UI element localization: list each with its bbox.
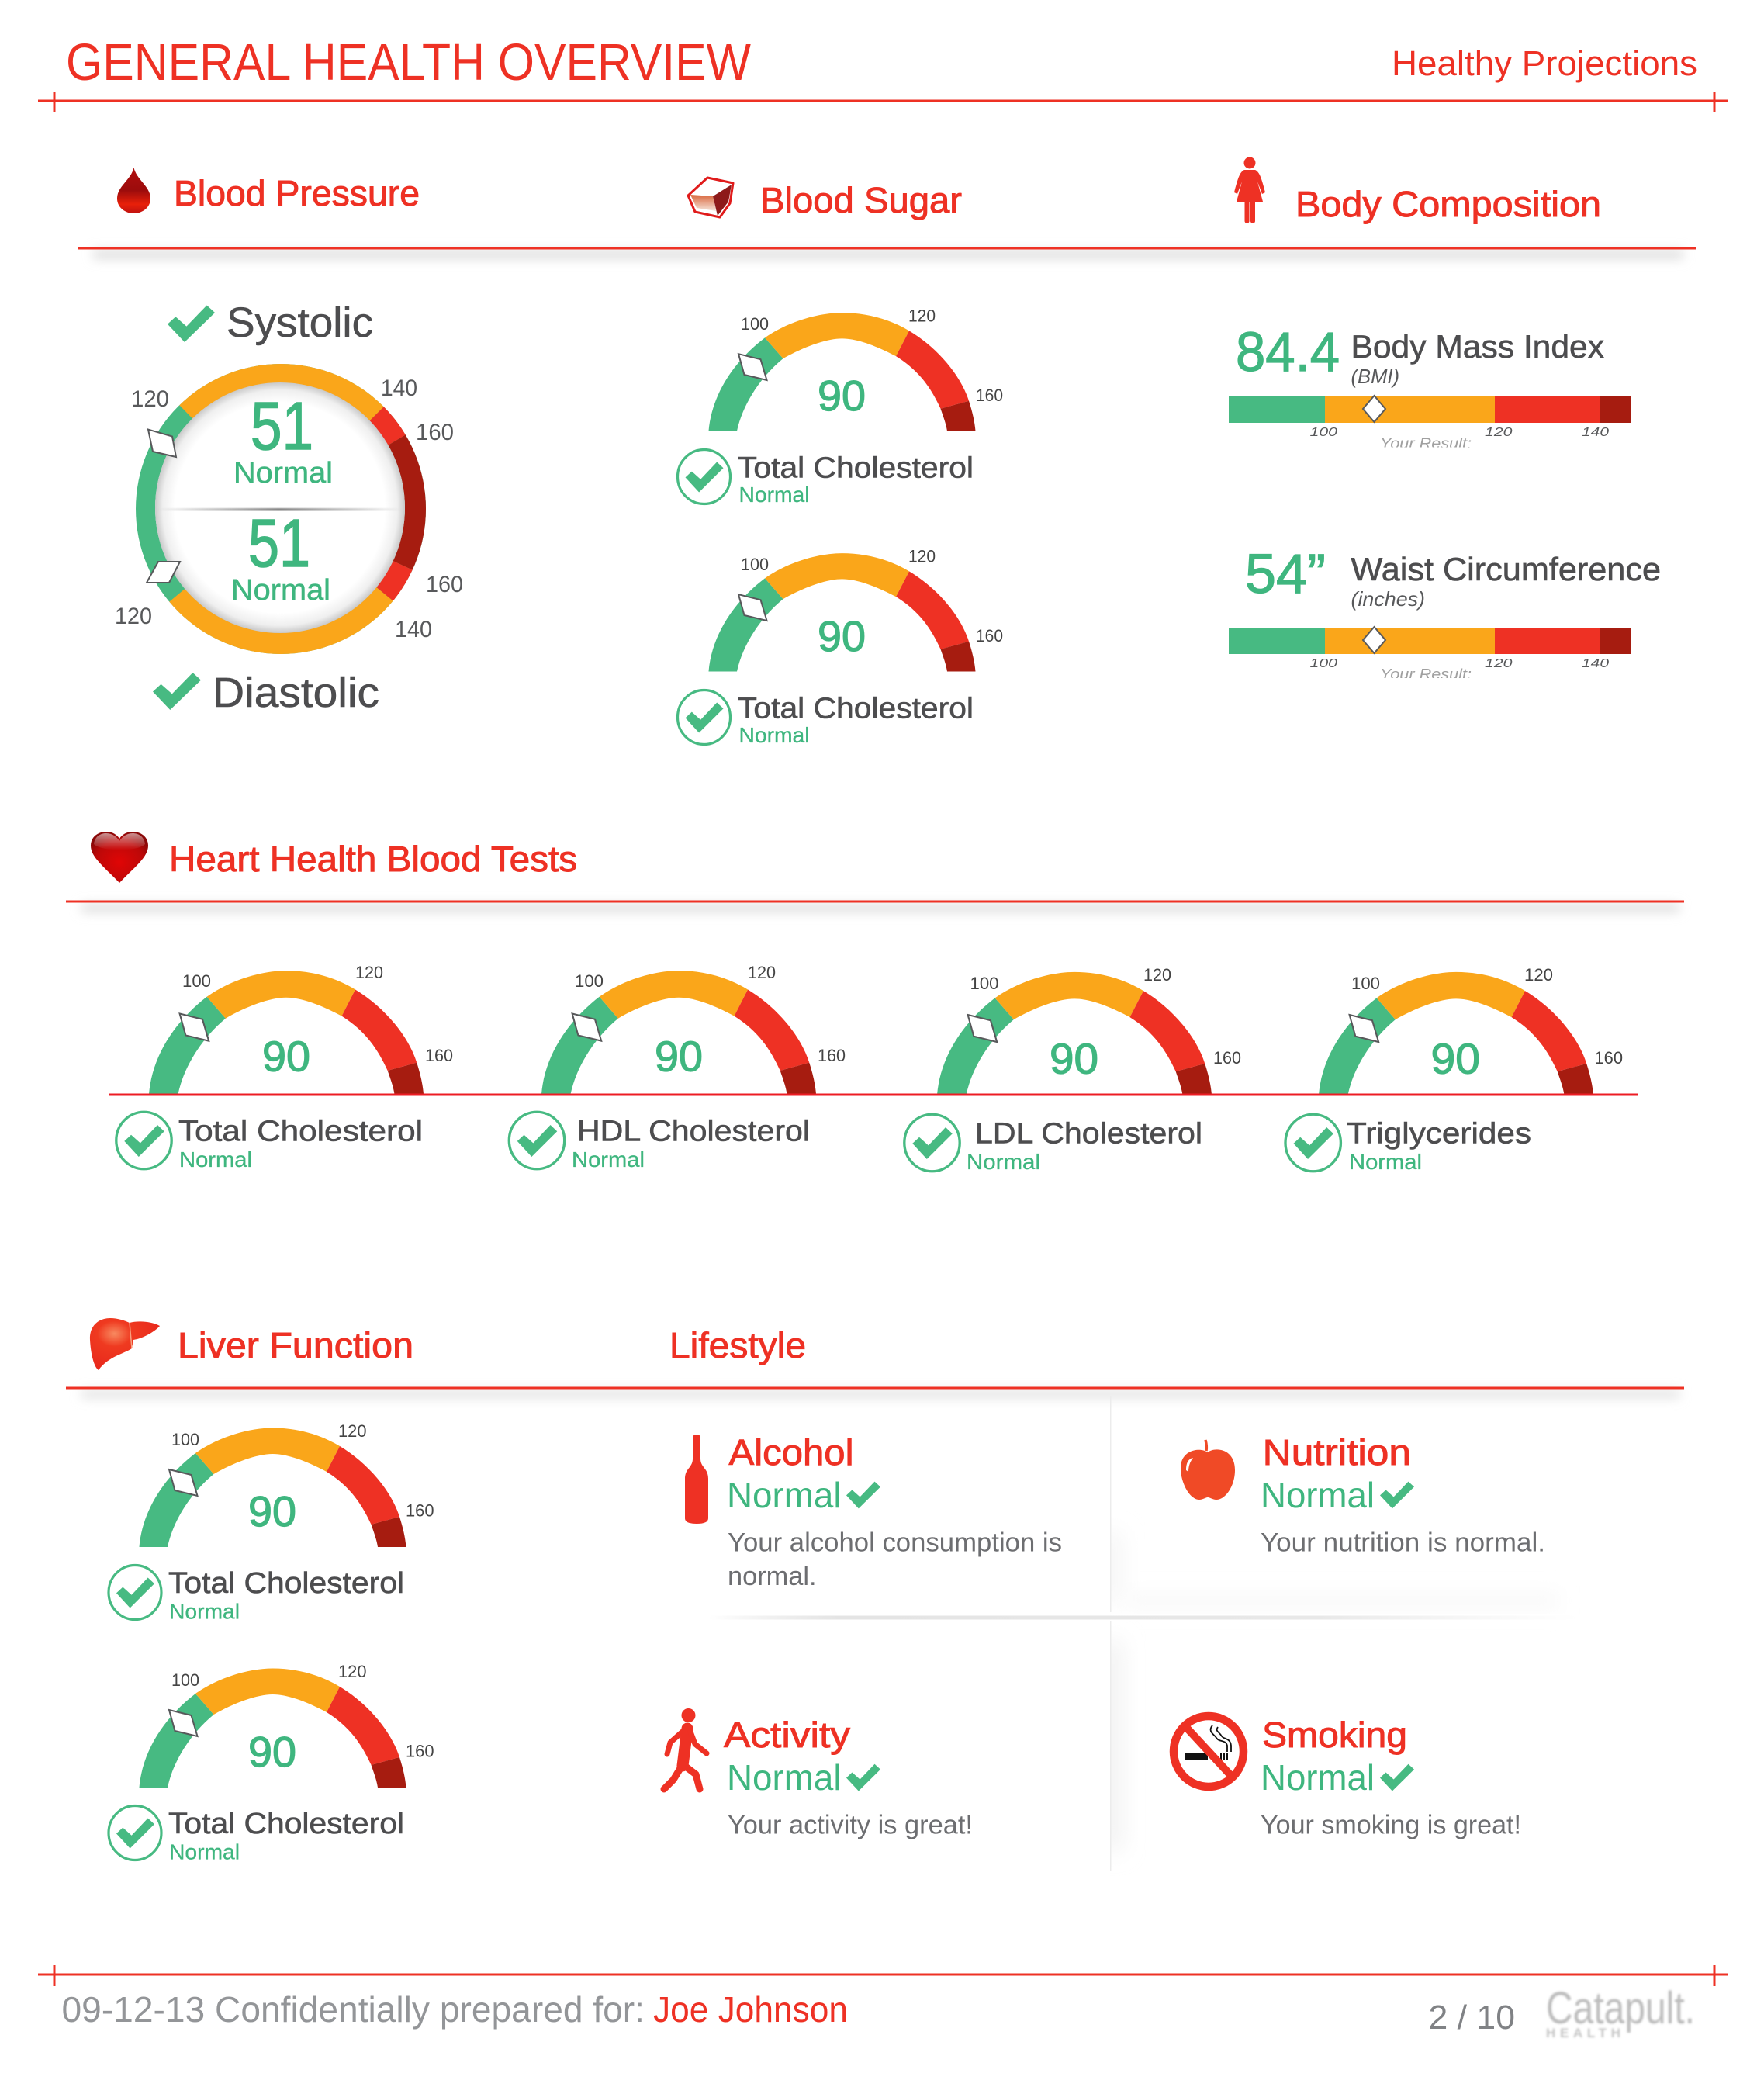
gauge: ldl cholesterol — [904, 965, 1241, 1174]
gauge: triglycerides — [1285, 965, 1623, 1174]
panel: activity: Your activity is great! — [728, 1811, 973, 1840]
blood sugar gauge 1: Normal — [738, 483, 810, 507]
panel: alcohol: Alcohol — [729, 1432, 853, 1473]
gauge: ldl cholesterol: LDL Cholesterol — [975, 1117, 1202, 1150]
section rule shadow liver — [81, 1390, 1679, 1398]
panel: activity: Normal — [727, 1757, 841, 1798]
heading: lifestyle: Lifestyle — [669, 1325, 806, 1365]
liver gauge 1: Normal — [169, 1600, 240, 1623]
gauge: hdl cholesterol: 100 — [575, 971, 604, 991]
blood sugar gauge 2: 100 — [741, 555, 769, 574]
icon: no smoking — [1174, 1716, 1243, 1787]
blood sugar gauge 2: Total Cholesterol — [738, 692, 974, 725]
gauge: hdl cholesterol: Normal — [572, 1147, 645, 1172]
heading: heart health blood tests: Heart Health Blood Tests — [169, 839, 577, 879]
section rule shadow top — [93, 250, 1683, 259]
gauge: triglycerides: Normal — [1349, 1150, 1422, 1174]
gauge: total cholesterol: Normal — [179, 1147, 252, 1172]
chart: blood pressure circular gauge — [116, 364, 462, 654]
subtitle: healthy projections: Healthy Projections — [1392, 43, 1697, 83]
gauge: total cholesterol: 90 — [262, 1032, 310, 1080]
icon: bottle — [685, 1435, 708, 1524]
liver gauge 2: 160 — [406, 1741, 434, 1761]
gauge tick labels: 160 — [426, 572, 463, 597]
gauge: total cholesterol: Total Cholesterol — [178, 1116, 423, 1148]
panel: body mass index: 100 — [1309, 426, 1337, 439]
panel: smoking: Normal — [1261, 1757, 1375, 1798]
section rule top — [78, 247, 1696, 250]
panel: alcohol: Normal — [727, 1475, 841, 1515]
blood sugar gauge 2: 120 — [908, 546, 936, 566]
panel: activity — [664, 1708, 973, 1840]
gauge: triglycerides: 100 — [1351, 974, 1380, 993]
label: diastolic: Diastolic — [213, 670, 379, 716]
panel: nutrition: Nutrition — [1263, 1432, 1411, 1473]
gauge inner disc — [155, 382, 405, 633]
lifestyle dividers — [709, 1396, 1669, 1885]
blood sugar gauge 1: 160 — [976, 386, 1003, 405]
panel: body mass index: 140 — [1582, 426, 1609, 439]
gauge: ldl cholesterol: 100 — [970, 974, 999, 993]
panel: waist circumference: Waist Circumference — [1351, 551, 1661, 587]
blood sugar gauge 1: 100 — [741, 314, 769, 334]
liver gauge 2: Total Cholesterol — [168, 1808, 404, 1840]
gauge tick labels: 120 — [131, 386, 169, 412]
diastolic value: 51 — [248, 506, 310, 581]
gauge tick labels: 140 — [381, 376, 417, 401]
panel: smoking: Your smoking is great! — [1261, 1811, 1521, 1840]
icon: apple — [1181, 1440, 1235, 1500]
gauge tick labels — [115, 376, 463, 642]
gauge: hdl cholesterol: 90 — [655, 1032, 703, 1080]
heading: liver function: Liver Function — [178, 1325, 413, 1365]
liver gauge 1: 100 — [171, 1430, 199, 1449]
blood sugar gauge 1: Total Cholesterol — [738, 452, 974, 484]
panel: body mass index: Your Result: — [1380, 436, 1472, 452]
liver gauge 2: 120 — [338, 1662, 366, 1681]
liver gauge 1: 120 — [338, 1421, 366, 1441]
liver gauge 1: 160 — [406, 1500, 434, 1521]
blood sugar gauge 2: 90 — [818, 612, 866, 660]
panel: waist circumference: 120 — [1485, 657, 1513, 670]
gauge: ldl cholesterol: 90 — [1050, 1035, 1098, 1083]
marker: diastolic — [147, 562, 180, 583]
panel: waist circumference — [1229, 544, 1661, 684]
page number: 2 / 10 — [1429, 1999, 1515, 2037]
panel: nutrition: Your nutrition is normal. — [1261, 1528, 1545, 1558]
gauge: total cholesterol — [116, 963, 453, 1172]
blood sugar gauge 1 — [678, 306, 1003, 507]
panel: waist circumference: 54” — [1245, 544, 1326, 605]
gauge: triglycerides: 90 — [1430, 1035, 1480, 1083]
gauge: hdl cholesterol: 120 — [748, 963, 776, 982]
systolic value: 51 — [251, 389, 313, 464]
blood sugar gauge 2: 160 — [976, 626, 1003, 645]
heading: body composition: Body Composition — [1295, 184, 1601, 224]
gauge: hdl cholesterol: 160 — [818, 1046, 846, 1065]
section rule liver — [66, 1387, 1684, 1389]
footer name: Joe Johnson — [653, 1989, 848, 2030]
panel: waist circumference: Your Result: — [1380, 667, 1472, 683]
logo: catapult health: HEALTH — [1546, 2026, 1620, 2040]
icon: liver — [90, 1318, 160, 1370]
section rule shadow heart — [81, 904, 1679, 912]
panel: smoking — [1174, 1715, 1521, 1840]
panel: body mass index: 84.4 — [1236, 322, 1340, 383]
icon: heart — [91, 832, 148, 883]
icon: sugar cube — [688, 178, 733, 217]
gauge: total cholesterol: 100 — [182, 971, 211, 991]
liver gauge 1: 90 — [248, 1487, 296, 1535]
gauge: ldl cholesterol: Normal — [967, 1150, 1040, 1174]
liver gauge 1: Total Cholesterol — [168, 1567, 404, 1600]
gauge: triglycerides: 120 — [1524, 965, 1553, 985]
label: systolic: Systolic — [227, 299, 373, 346]
liver gauge 2: 100 — [171, 1670, 199, 1690]
gauge tick labels: 120 — [115, 604, 152, 629]
panel: nutrition: Normal — [1261, 1475, 1375, 1515]
gauge: triglycerides: 160 — [1595, 1048, 1623, 1068]
gauge baseline — [109, 1094, 1638, 1095]
gauge divider — [157, 508, 402, 510]
icon: diastolic check — [153, 673, 201, 710]
gauge: total cholesterol: 160 — [425, 1046, 453, 1065]
panel: waist circumference: (inches) — [1351, 587, 1425, 611]
gauge tick labels: 160 — [416, 420, 454, 445]
panel: nutrition — [1181, 1432, 1545, 1558]
liver gauge 2 — [109, 1662, 434, 1864]
icon: walking person — [664, 1708, 707, 1789]
liver gauge 2: Normal — [169, 1840, 240, 1864]
gauge: ldl cholesterol: 120 — [1143, 965, 1171, 985]
footer date and preparation note: 09-12-13 Confidentially prepared for: — [62, 1989, 645, 2030]
panel: waist circumference: 140 — [1582, 657, 1609, 670]
systolic status: Normal — [233, 457, 333, 490]
blood sugar gauge 1: 90 — [818, 372, 866, 420]
icon: woman — [1234, 157, 1265, 223]
heading: blood sugar: Blood Sugar — [760, 180, 962, 220]
panel: alcohol — [685, 1432, 1062, 1591]
icon: systolic check — [168, 306, 215, 342]
title: GENERAL HEALTH OVERVIEW — [66, 33, 752, 92]
panel: alcohol: Your alcohol consumption is — [728, 1528, 1062, 1558]
logo: catapult health: Catapult. — [1546, 1983, 1695, 2033]
icon: blood drop — [117, 168, 150, 213]
panel: waist circumference: 100 — [1309, 657, 1337, 670]
liver gauge 2: 90 — [248, 1728, 296, 1776]
panel: body mass index: (BMI) — [1351, 365, 1399, 388]
gauge: hdl cholesterol — [509, 963, 846, 1172]
blood sugar gauge 1: 120 — [908, 306, 936, 326]
panel: activity: Activity — [724, 1715, 850, 1755]
panel: body mass index: Body Mass Index — [1351, 328, 1604, 365]
header rule — [38, 92, 1728, 112]
gauge tick labels: 140 — [395, 617, 432, 642]
diastolic status: Normal — [231, 574, 330, 607]
gauge: total cholesterol: 120 — [355, 963, 383, 982]
liver gauge 1 — [109, 1421, 434, 1623]
panel: body mass index: 120 — [1485, 426, 1513, 439]
gauge: hdl cholesterol: HDL Cholesterol — [577, 1116, 810, 1148]
footer rule — [38, 1965, 1728, 1986]
blood sugar gauge 2 — [678, 546, 1003, 747]
panel: smoking: Smoking — [1262, 1715, 1407, 1755]
marker: systolic — [148, 430, 176, 457]
panel: alcohol: normal. — [728, 1562, 817, 1591]
gauge: ldl cholesterol: 160 — [1213, 1048, 1241, 1068]
gauge: triglycerides: Triglycerides — [1347, 1117, 1531, 1150]
panel: body mass index — [1229, 322, 1631, 453]
blood sugar gauge 2: Normal — [738, 723, 810, 747]
heading: blood pressure: Blood Pressure — [174, 173, 420, 213]
gauge ring — [136, 364, 426, 654]
section rule heart — [66, 900, 1684, 903]
